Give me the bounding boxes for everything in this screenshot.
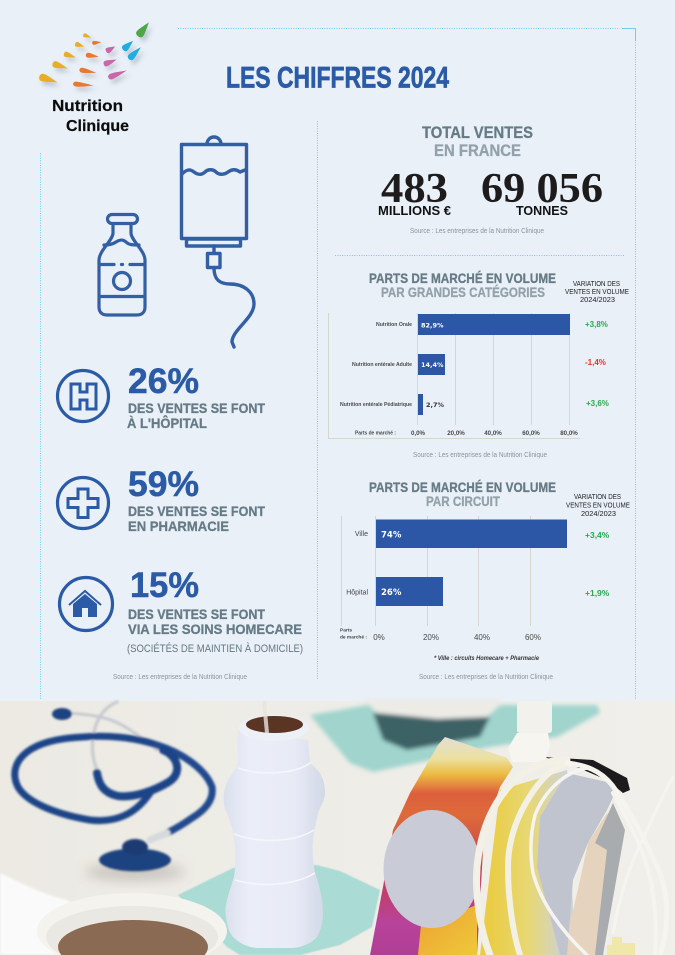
- logo: Nutrition Clinique: [38, 20, 152, 135]
- value 69 056 tonnes: TONNES: [516, 203, 568, 218]
- variation header categories: 2024/2023: [580, 297, 615, 304]
- bar chart categories: Nutrition entérale Adulte: [352, 362, 412, 368]
- stethoscope: [15, 702, 212, 881]
- variations categories: +3,6%: [586, 399, 609, 408]
- title: LES CHIFFRES 2024: [226, 62, 449, 94]
- bar chart circuit: [340, 516, 567, 642]
- icon: nutrition bottle: [99, 214, 145, 315]
- stat: hospital 26%: [58, 362, 265, 431]
- logo droplets: [38, 20, 152, 88]
- variation header circuit: 2024/2023: [581, 511, 616, 518]
- panel: total ventes en France: [378, 124, 603, 235]
- heading circuit: PARTS DE MARCHÉ EN VOLUME: [369, 480, 556, 495]
- logo wordmark: Nutrition: [52, 98, 123, 115]
- white cloth: [0, 873, 140, 955]
- white bottle: [224, 701, 325, 948]
- heading categories: PARTS DE MARCHÉ EN VOLUME: [369, 271, 556, 286]
- icon: IV nutrition bag: [182, 137, 254, 347]
- logo wordmark: [52, 98, 129, 135]
- heading total ventes: EN FRANCE: [434, 142, 521, 160]
- bar chart categories: 82,9%: [421, 322, 444, 330]
- description homecare: DES VENTES SE FONT: [128, 606, 265, 622]
- bar chart categories: 2,7%: [426, 401, 445, 409]
- bar chart categories: 80,0%: [560, 430, 578, 437]
- bar chart categories: 20,0%: [447, 430, 465, 437]
- source left: Source : Les entreprises de la Nutrition Clinique: [113, 674, 247, 681]
- stat: homecare 15%: [60, 566, 303, 655]
- heading circuit: PAR CIRCUIT: [426, 494, 501, 509]
- bar chart categories: 60,0%: [522, 430, 540, 437]
- value 26%: 26%: [128, 362, 199, 401]
- value 15%: 15%: [130, 566, 199, 605]
- bar chart circuit: Parts: [340, 628, 352, 634]
- bar chart categories: 40,0%: [484, 430, 502, 437]
- clear tubing: [477, 760, 673, 955]
- variations circuit: +1,9%: [585, 588, 610, 598]
- description hospital: DES VENTES SE FONT: [128, 400, 265, 416]
- value 59%: 59%: [128, 465, 199, 504]
- bar chart categories: Nutrition Orale: [376, 322, 412, 328]
- description homecare: [127, 606, 303, 655]
- heading categories: [369, 271, 556, 300]
- bar chart circuit: 0%: [373, 633, 385, 642]
- icon: home: [60, 578, 112, 630]
- icon: hospital: [58, 370, 108, 422]
- description pharmacy: [128, 503, 265, 534]
- logo wordmark: Clinique: [66, 118, 129, 135]
- footnote circuit: * Ville : circuits Homecare + Pharmacie: [434, 656, 540, 662]
- bar chart circuit: Ville: [355, 531, 368, 538]
- source circuit: Source : Les entreprises de la Nutrition Clinique: [419, 674, 553, 681]
- icon: pharmacy cross: [58, 478, 108, 528]
- variations categories: [585, 320, 609, 408]
- variation header circuit: VENTES EN VOLUME: [566, 502, 630, 510]
- bar chart circuit: 40%: [474, 633, 490, 642]
- source total: Source : Les entreprises de la Nutrition Clinique: [410, 228, 544, 235]
- description pharmacy: DES VENTES SE FONT: [128, 503, 265, 519]
- heading categories: PAR GRANDES CATÉGORIES: [381, 285, 545, 300]
- teal tray back: [310, 699, 600, 772]
- teal tray front: [178, 865, 380, 955]
- value 483 millions: MILLIONS €: [378, 203, 451, 218]
- bar chart circuit: Hôpital: [346, 590, 368, 596]
- panel: parts de marché par grandes catégories: [328, 271, 629, 459]
- description hospital: À L'HÔPITAL: [127, 414, 207, 431]
- source categories: Source : Les entreprises de la Nutrition Clinique: [413, 452, 547, 459]
- small connector: [607, 937, 635, 955]
- variations circuit: +3,4%: [585, 530, 610, 540]
- photo: nutrition products and stethoscope: [0, 699, 675, 955]
- pouch spout: [508, 701, 552, 762]
- bar chart categories: 14,4%: [421, 361, 444, 369]
- variations circuit: [585, 530, 610, 598]
- bar chart categories: 0,0%: [411, 430, 426, 437]
- description pharmacy: EN PHARMACIE: [128, 518, 229, 534]
- bar chart circuit: 74%: [381, 530, 402, 540]
- description homecare: VIA LES SOINS HOMECARE: [128, 621, 302, 637]
- value 483 millions: 483: [381, 166, 448, 212]
- variations categories: -1,4%: [585, 358, 606, 367]
- stat: pharmacy 59%: [58, 465, 265, 534]
- description hospital: [127, 400, 265, 431]
- value 69 056 tonnes: 69 056: [481, 166, 603, 212]
- heading total ventes: [422, 124, 533, 160]
- heading total ventes: TOTAL VENTES: [422, 124, 533, 142]
- dessert bowl: [37, 893, 227, 955]
- variation header categories: VENTES EN VOLUME: [565, 289, 629, 296]
- variation header categories: VARIATION DES: [573, 281, 620, 288]
- heading circuit: [369, 480, 556, 509]
- nutrition pouch: [370, 737, 575, 955]
- bar chart categories: Parts de marché :: [355, 430, 396, 436]
- variation header categories: [565, 281, 629, 304]
- pouch back panel: [537, 757, 630, 955]
- bar chart circuit: 20%: [423, 633, 439, 642]
- bar chart categories: Nutrition entérale Pédiatrique: [340, 402, 412, 408]
- variation header circuit: VARIATION DES: [574, 494, 621, 501]
- bar chart circuit: 60%: [525, 633, 541, 642]
- variations categories: +3,8%: [585, 320, 608, 329]
- variation header circuit: [566, 494, 630, 518]
- bar chart circuit: 26%: [381, 588, 402, 598]
- bar chart circuit: de marché :: [340, 634, 367, 640]
- bar chart categories: [328, 313, 580, 438]
- panel: parts de marché par circuit: [340, 480, 630, 681]
- description homecare: (SOCIÉTÉS DE MAINTIEN À DOMICILE): [127, 642, 303, 655]
